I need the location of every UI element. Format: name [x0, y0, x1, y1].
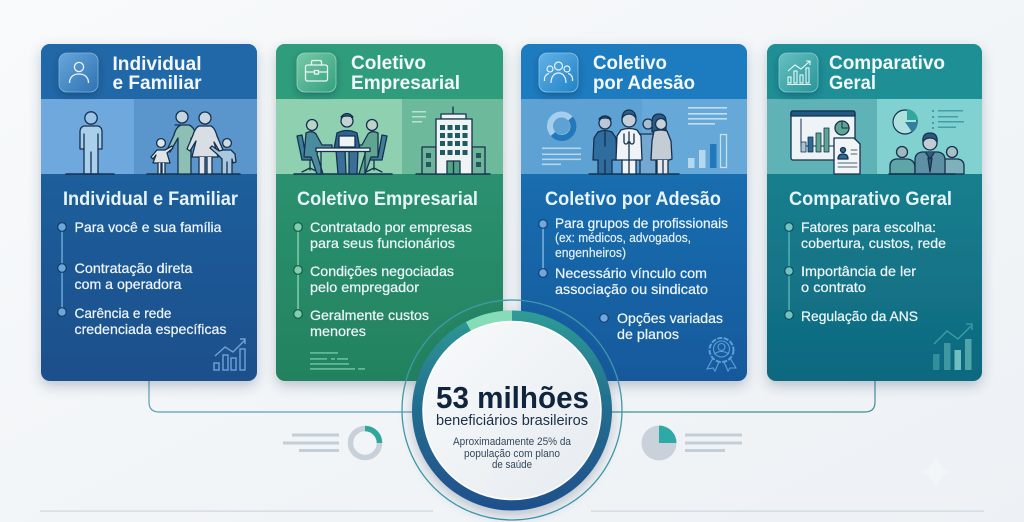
heading: Coletivo Empresarial header: Empresarial	[351, 73, 460, 94]
bottom rule: right	[591, 510, 984, 512]
decorative donut and lines: left	[283, 428, 380, 458]
text: bullet list	[555, 215, 728, 342]
bottom rule: left	[40, 510, 433, 512]
heading: Individual e Familiar header: e Familiar	[112, 73, 202, 94]
text: bullet list: Regulação da ANS	[801, 308, 918, 324]
text: bullet list: engenheiros)	[555, 246, 626, 260]
timeline bullets	[539, 220, 608, 322]
heading: Individual e Familiar header	[112, 54, 202, 94]
text: bullet list: Para você e sua família	[74, 219, 222, 235]
stat note	[453, 436, 572, 471]
connector line: left card to centre	[149, 381, 420, 412]
text: bullet list: Para grupos de profissionais	[555, 215, 728, 231]
icon: growth chart tile	[779, 53, 818, 92]
central statistic badge	[402, 300, 622, 520]
chart: pie and list	[893, 109, 964, 134]
icon: bars and trend	[933, 324, 972, 370]
icon: briefcase	[297, 53, 336, 92]
timeline bullets	[294, 223, 302, 318]
stat note: população com plano	[464, 448, 560, 460]
heading: Coletivo por Adesão: Coletivo por Adesão	[545, 189, 721, 210]
text: bullet list: Condições negociadas	[310, 263, 454, 279]
heading: Coletivo Empresarial: Coletivo Empresarial	[297, 189, 478, 210]
text: bullet list: Fatores para escolha:	[801, 219, 936, 235]
illustration: family	[147, 111, 240, 174]
icon: growth chart	[214, 339, 245, 370]
stat label: beneficiários brasileiros	[436, 412, 588, 429]
illustration: three people	[889, 133, 964, 174]
text: bullet list: (ex: médicos, advogados,	[555, 231, 691, 245]
illustration: dashboard and document	[791, 111, 860, 174]
text: bullet list: Necessário vínculo com	[555, 265, 707, 281]
panel: Individual e Familiar	[41, 44, 257, 381]
text: bullet list: Opções variadas	[617, 310, 723, 326]
text: bullet list: o contrato	[801, 279, 866, 295]
heading: Comparativo Geral header: Geral	[829, 73, 876, 94]
heading: Individual e Familiar: Individual e Familiar	[63, 189, 239, 210]
text: bullet list: Carência e rede	[74, 305, 172, 321]
text: bullet list: Contratado por empresas	[310, 219, 472, 235]
stat note: Aproximadamente 25% da	[453, 436, 572, 448]
heading: Coletivo por Adesão header: por Adesão	[593, 73, 695, 94]
icon: group of people	[539, 53, 578, 92]
chart: donut and text lines	[542, 114, 581, 165]
text: bullet list: Contratação direta	[74, 260, 193, 276]
icon: person	[59, 53, 98, 92]
stat: 53 milhões: 53 milhões	[436, 380, 589, 415]
heading: Comparativo Geral header	[829, 53, 945, 94]
panel: Coletivo Empresarial	[276, 44, 503, 381]
text: bullet list: Geralmente custos	[310, 307, 429, 323]
illustration: single person	[66, 112, 114, 174]
decorative sparkle	[919, 455, 952, 489]
heading: Coletivo por Adesão header: Coletivo	[593, 53, 667, 74]
text: bullet list: Importância de ler	[801, 263, 916, 279]
icon: text lines	[310, 352, 365, 370]
panel: Coletivo por Adesão	[521, 44, 747, 381]
text: bullet list: de planos	[617, 326, 679, 342]
text: bullet list	[801, 219, 946, 324]
text: bullet list	[74, 219, 226, 337]
illustration: business meeting	[294, 114, 392, 174]
heading: Comparativo Geral: Comparativo Geral	[789, 189, 952, 210]
text: bullet list: associação ou sindicato	[555, 281, 708, 297]
timeline bullets	[58, 223, 66, 316]
text: bullet list: cobertura, custos, rede	[801, 235, 946, 251]
decorative pie and lines: right	[642, 426, 742, 460]
text: bullet list: para seus funcionários	[310, 235, 455, 251]
connector line: right card to centre	[604, 381, 875, 412]
text: bullet list: pelo empregador	[310, 279, 419, 295]
text: bullet list	[310, 219, 472, 339]
text: bullet list: menores	[310, 323, 366, 339]
text: bullet list: com a operadora	[74, 276, 182, 292]
panel: Comparativo Geral	[767, 44, 982, 381]
heading: Individual e Familiar header: Individual	[112, 54, 202, 75]
heading: Coletivo Empresarial header	[351, 53, 460, 94]
illustration: professionals	[589, 110, 679, 174]
heading: Comparativo Geral header: Comparativo	[829, 53, 945, 74]
text: bullet list: credenciada específicas	[74, 321, 226, 337]
timeline bullets	[785, 223, 793, 319]
heading: Coletivo por Adesão header	[593, 53, 695, 94]
heading: Coletivo Empresarial header: Coletivo	[351, 53, 426, 74]
icon: award badge	[707, 338, 736, 371]
stat note: de saúde	[492, 459, 532, 471]
chart: lines and bars	[688, 107, 727, 168]
illustration: office building	[412, 107, 490, 174]
